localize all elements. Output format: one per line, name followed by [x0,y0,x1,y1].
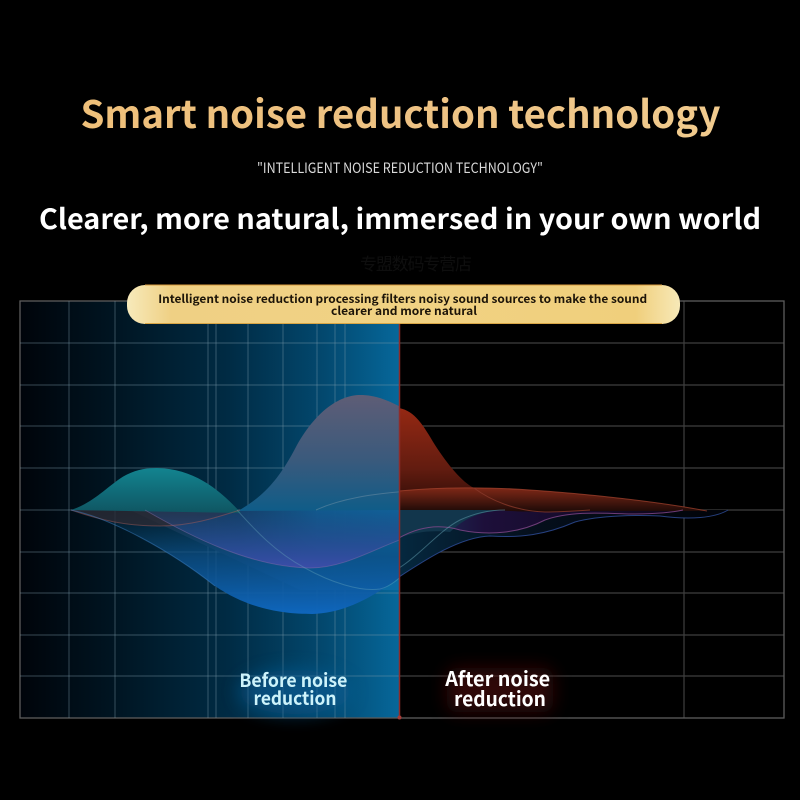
panel: before noise reduction background [20,301,399,718]
title: Smart noise reduction technology [80,84,721,139]
dark blue tail [399,510,728,577]
callout text: Intelligent noise reduction processing filters noisy sound sources to make the sound [158,291,647,307]
thin curves [399,488,728,577]
chart: before and after noise reduction [20,301,784,720]
waveforms: before side [71,395,410,614]
label: after noise reduction: reduction [454,683,546,712]
red flat wave [399,488,707,512]
teal remnant [400,510,496,536]
grid lines [20,301,784,718]
lower band below the axis [164,510,398,590]
label: after noise reduction [444,663,555,712]
divider end dot [398,716,402,720]
thin curves [71,491,410,590]
blue wave [106,520,399,614]
dark purple tail [454,510,672,532]
label: before noise reduction [239,667,352,714]
faint watermark: 专盟数码专营店 [360,255,472,274]
dark lens below axis [71,510,240,526]
label: before noise reduction: reduction [254,685,336,711]
waveforms: after side [399,408,728,577]
subtitle: "INTELLIGENT NOISE REDUCTION TECHNOLOGY" [257,158,543,178]
red peak [399,408,474,495]
callout pill [127,285,680,324]
callout text: clearer and more natural [331,303,477,319]
label: before noise reduction: Before noise [239,667,347,693]
grey hump [238,395,410,511]
label: after noise reduction: After noise [444,663,550,692]
teal hump [71,468,241,513]
purple wave [145,510,410,568]
tagline: Clearer, more natural, immersed in your own world [39,198,761,238]
divider line [398,324,400,718]
